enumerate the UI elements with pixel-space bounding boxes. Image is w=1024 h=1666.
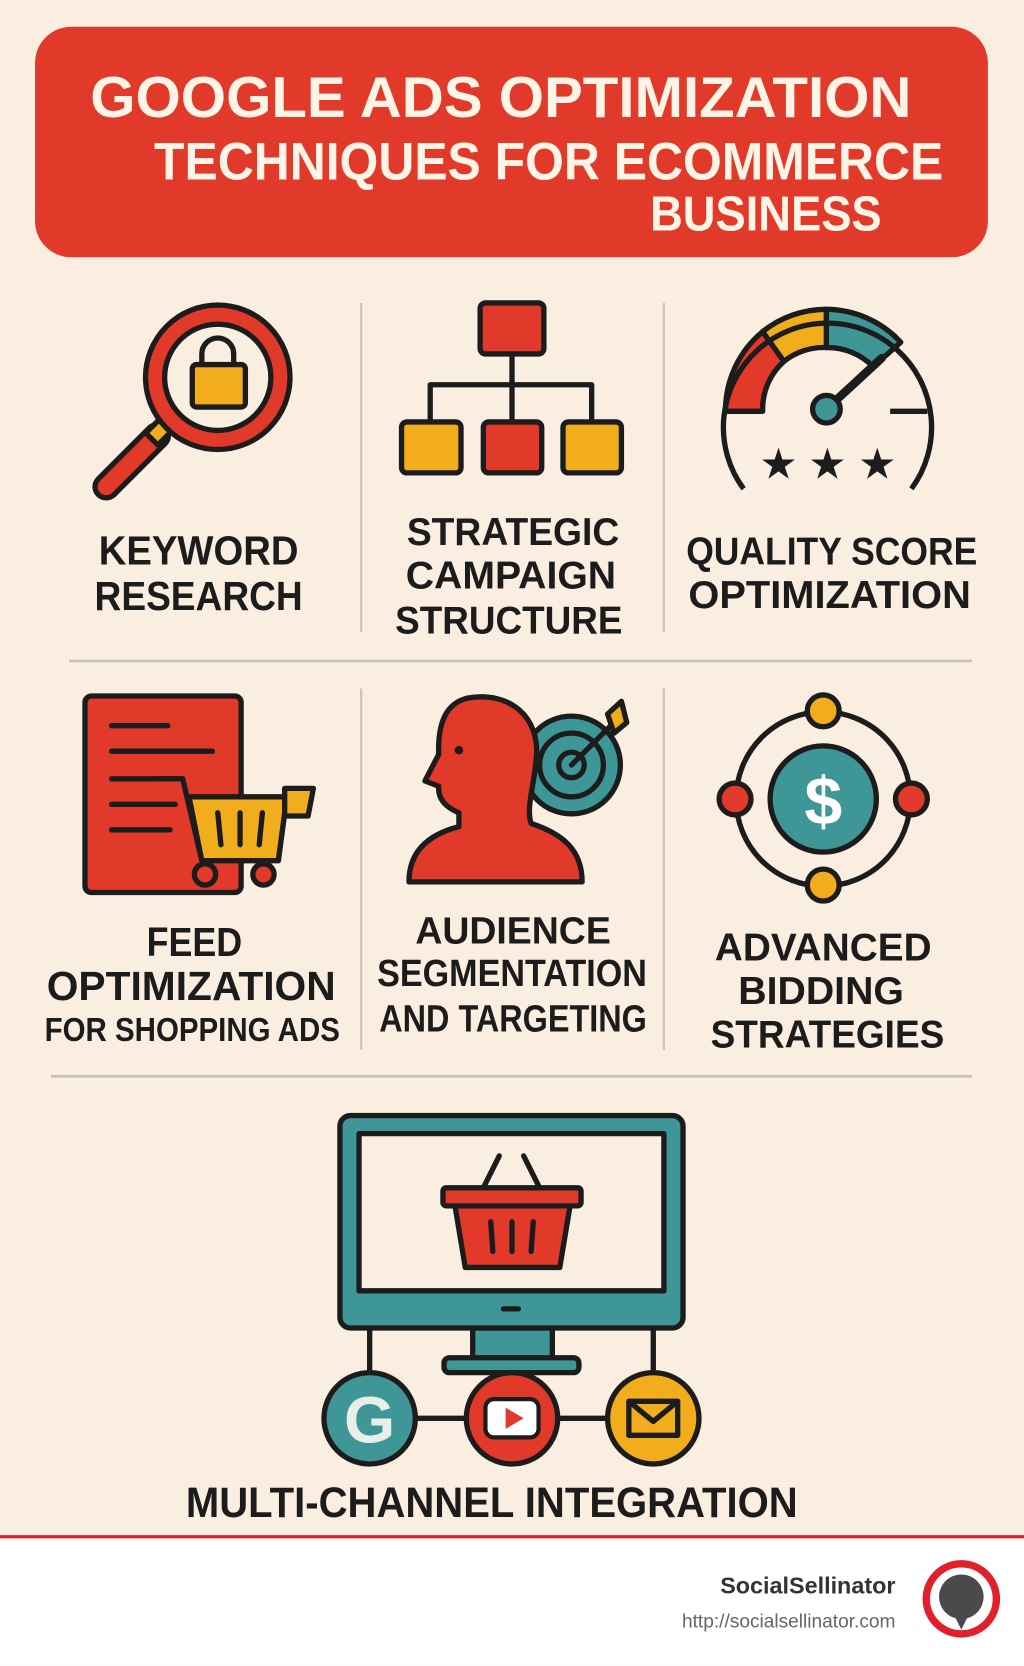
label: FEED (147, 919, 242, 965)
panel: keyword research: RESEARCH (95, 573, 303, 619)
icon: org chart (402, 303, 621, 473)
icon: logo (926, 1564, 996, 1634)
panel: quality score: OPTIMIZATION (688, 573, 971, 617)
label: MULTI-CHANNEL INTEGRATION (186, 1480, 798, 1527)
panel: bidding strategies: STRATEGIES (711, 1013, 944, 1057)
panel: feed optimization (45, 696, 340, 1048)
title banner: BUSINESS (650, 188, 882, 242)
panel: quality score: ★ (761, 443, 796, 486)
icon: monitor with basket (340, 1116, 683, 1418)
icon: document with cart (85, 696, 313, 892)
title banner (35, 27, 988, 257)
panel: quality score: ★ (810, 443, 845, 486)
panel: multi-channel integration: G (344, 1383, 395, 1457)
label: AUDIENCE (415, 909, 611, 952)
label: KEYWORD (99, 527, 298, 573)
panel: bidding strategies: BIDDING (738, 969, 904, 1013)
label: STRATEGIC (407, 510, 619, 554)
panel: audience segmentation: SEGMENTATION (377, 952, 647, 995)
panel: campaign structure: CAMPAIGN (406, 554, 616, 598)
icon: google (324, 1373, 415, 1464)
panel: feed optimization: FOR SHOPPING ADS (45, 1011, 340, 1048)
panel: bidding strategies: $ (804, 764, 842, 840)
icon: head with target (409, 697, 627, 882)
icon: dollar orbit (719, 695, 927, 901)
label: QUALITY SCORE (686, 529, 977, 573)
panel: quality score: ★ (860, 443, 895, 486)
footer (0, 1535, 1024, 1666)
icon: gauge with stars (723, 309, 932, 489)
panel: campaign structure: STRUCTURE (395, 598, 622, 642)
panel: bidding strategies (711, 695, 944, 1057)
footer: SocialSellinator (720, 1573, 895, 1599)
footer: http://socialsellinator.com (682, 1612, 895, 1633)
panel: keyword research (95, 305, 303, 619)
icon: youtube (466, 1373, 558, 1464)
panel: audience segmentation (377, 697, 647, 1041)
title banner: TECHNIQUES FOR ECOMMERCE (154, 133, 943, 192)
panel: multi-channel integration (186, 1116, 798, 1527)
panel: audience segmentation: AND TARGETING (379, 998, 647, 1041)
icon: email (608, 1373, 699, 1464)
panel: campaign structure (395, 303, 622, 642)
icon: magnifier with lock (106, 305, 290, 487)
title banner: GOOGLE ADS OPTIMIZATION (90, 66, 911, 130)
panel: feed optimization: OPTIMIZATION (47, 963, 336, 1009)
panel: quality score (686, 309, 977, 617)
label: ADVANCED (715, 925, 932, 969)
